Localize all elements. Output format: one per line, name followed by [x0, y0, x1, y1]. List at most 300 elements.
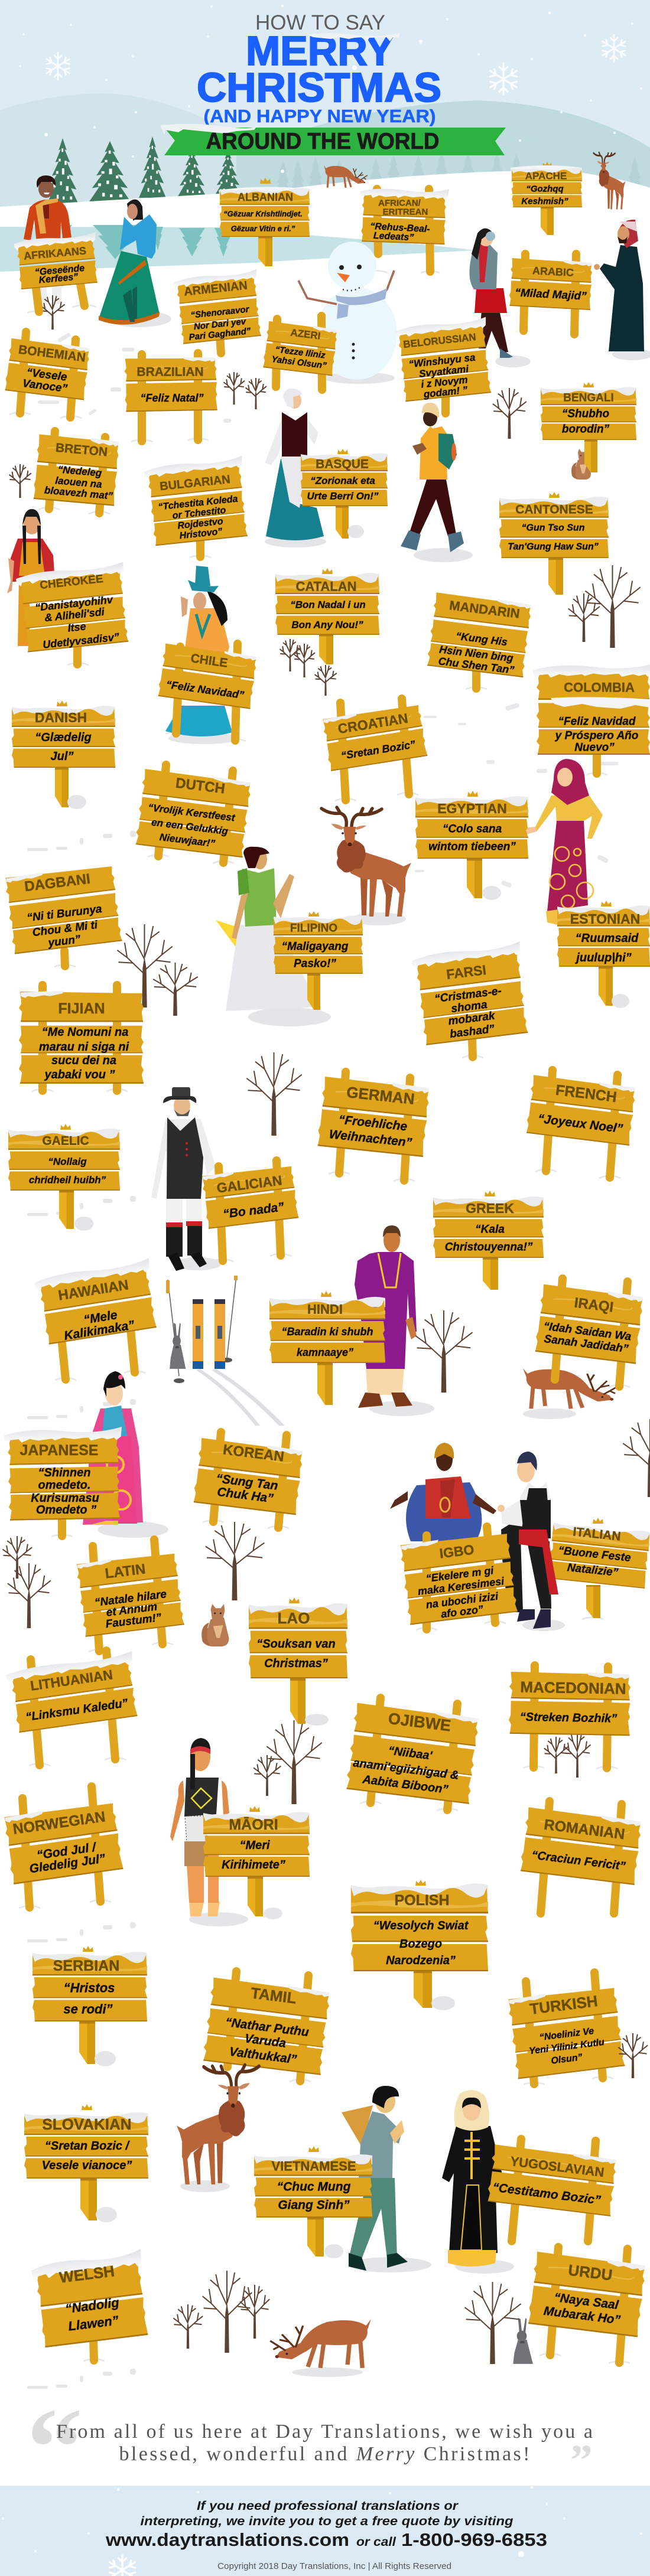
greeting — [31, 1466, 99, 1517]
greeting — [64, 2295, 121, 2334]
language name: NORWEGIAN — [12, 1808, 106, 1838]
language name: SERBIAN — [53, 1958, 119, 1974]
sign: Urdu — [527, 2247, 646, 2363]
greeting: maka Keresimesi — [417, 1575, 505, 1597]
greeting: “Feliz Navidad — [558, 716, 636, 728]
language name: DUTCH — [175, 775, 226, 797]
greeting: “Maligayang — [282, 940, 349, 953]
language name: FIJIAN — [58, 1000, 105, 1017]
greeting — [34, 263, 85, 285]
greeting: Urte Berri On!” — [307, 490, 379, 502]
greeting: Itse — [67, 620, 86, 634]
greeting: “Hristos — [64, 1981, 115, 1995]
language name: HAWAIIAN — [57, 1277, 129, 1304]
greeting: Chu Shen Tan” — [438, 655, 515, 676]
greeting — [373, 1919, 469, 1967]
sign: Japanese — [4, 1427, 124, 1536]
sign: Maori — [203, 1806, 310, 1919]
language name: ARMENIAN — [183, 279, 248, 299]
title block — [160, 11, 506, 155]
language name: CANTONESE — [515, 503, 593, 516]
phone number: 1-800-969-6853 — [401, 2529, 547, 2550]
language name: GREEK — [466, 1201, 514, 1216]
greeting: “Chuc Mung — [277, 2180, 351, 2193]
sky panel — [0, 0, 650, 301]
greeting: “Feliz Natal” — [140, 392, 204, 404]
greeting — [508, 523, 599, 552]
greeting — [555, 716, 638, 754]
bare trees — [2, 295, 650, 2364]
greeting: “Bon Nadal i un — [290, 599, 366, 611]
greeting: Mubarak Ho” — [543, 2304, 622, 2327]
greeting — [277, 2180, 351, 2212]
greeting: Chou & Mi ti — [32, 919, 99, 939]
heading: around the world: AROUND THE WORLD — [206, 129, 440, 154]
sign: Belorussian — [394, 317, 494, 413]
greeting: Bozego — [399, 1938, 442, 1951]
greeting — [215, 1472, 279, 1505]
greeting: Yahsi Olsun” — [271, 354, 327, 371]
greeting: “Gun Tso Sun — [522, 523, 585, 533]
greeting: “Ruumsaid — [576, 932, 639, 945]
greeting: omedeto. — [38, 1479, 90, 1492]
deer: standing top right — [593, 152, 626, 209]
greeting: yuun” — [47, 933, 82, 950]
falling snow dots — [19, 5, 642, 190]
language name: BOHEMIAN — [18, 343, 86, 364]
greeting — [329, 1113, 413, 1150]
language name: CHILE — [190, 651, 229, 670]
greeting — [428, 823, 516, 853]
frozen lake — [0, 225, 476, 272]
greeting: Kirihimete” — [222, 1858, 285, 1871]
greeting: “Sretan Bozic” — [340, 738, 416, 762]
sign: Filipino — [274, 911, 363, 1010]
closing message — [56, 2421, 593, 2465]
greeting — [26, 903, 103, 950]
greeting: “Nathar Puthu — [225, 2016, 310, 2039]
greeting: Kerfees” — [38, 272, 79, 285]
greeting: borodin” — [562, 423, 610, 436]
language name: BELORUSSIAN — [402, 331, 477, 350]
greeting: “Gëzuar Krishtlindjet. — [223, 209, 303, 219]
greeting: Llawen” — [67, 2313, 119, 2334]
greeting — [222, 1839, 285, 1871]
figure: man with red sash — [498, 1452, 565, 1631]
language name: BENGALI — [563, 392, 614, 404]
sign: Armenian — [173, 269, 264, 353]
sign: Arabic — [509, 254, 593, 334]
figure: woman in green blouse — [216, 847, 331, 1026]
sign: Estonian — [557, 901, 650, 1008]
greeting — [29, 1156, 106, 1186]
language name: VIETNAMESE — [271, 2159, 356, 2173]
language name: CROATIAN — [337, 710, 409, 736]
language name: KOREAN — [222, 1442, 285, 1465]
language name: AZERI — [290, 327, 321, 342]
greeting — [44, 464, 113, 502]
forest of snowy fir trees — [46, 136, 242, 206]
language name: AFRIKAANS — [23, 244, 87, 262]
greeting — [543, 2291, 622, 2327]
greeting: “Sretan Bozic / — [45, 2140, 131, 2153]
greeting: Chuk Ha” — [216, 1485, 274, 1505]
language name: HINDI — [307, 1302, 343, 1317]
greeting: “Craciun Fericit” — [531, 1848, 626, 1873]
greeting — [28, 1840, 106, 1876]
greeting: Christmas” — [264, 1657, 328, 1670]
heading: christmas: CHRISTMAS — [197, 64, 441, 110]
greeting — [290, 599, 366, 631]
language name: TAMIL — [250, 1984, 297, 2007]
deer: grazing right side — [523, 1368, 618, 1419]
language name: BRETON — [55, 441, 108, 459]
sign: Danish — [12, 700, 115, 809]
greeting: “Glædelig — [35, 731, 92, 744]
sign: Lao — [249, 1597, 347, 1726]
greeting: “Tezze Iliniz — [275, 344, 326, 361]
greeting: “Vesele — [25, 366, 68, 384]
sign: Iraqi — [534, 1279, 644, 1387]
sign: Norwegian — [3, 1786, 124, 1907]
greeting: y Próspero Año — [555, 730, 638, 742]
footer snow dots — [2, 2486, 642, 2557]
sign: Chile — [157, 643, 258, 741]
greeting: godam! ” — [422, 384, 469, 400]
sign: Bengali — [541, 382, 636, 472]
language name: LITHUANIAN — [30, 1667, 113, 1694]
greeting: “Cestitamo Bozic” — [492, 2180, 602, 2207]
language name: COLOMBIA — [564, 680, 635, 694]
language name: ARABIC — [532, 265, 574, 279]
greeting: “Sung Tan — [215, 1472, 279, 1493]
greeting: mobarak — [447, 1010, 496, 1028]
sign: Fijian — [19, 985, 144, 1091]
sign: Slovakian — [24, 2104, 148, 2222]
greeting: Ledeats” — [373, 231, 414, 243]
greeting — [22, 366, 69, 395]
greeting: Vanoce” — [22, 377, 69, 395]
sign: Cherokee — [15, 562, 132, 664]
mountains — [0, 93, 650, 213]
green banner — [164, 128, 506, 155]
language name: FILIPINO — [290, 922, 337, 934]
greeting: “Ekelere m gi — [425, 1564, 495, 1584]
snow on merry — [306, 33, 400, 43]
greeting: “Linksmu Kaledu” — [25, 1697, 129, 1724]
language name: JAPANESE — [20, 1442, 98, 1459]
greeting: “Vrolijk Kerstfeest — [147, 802, 236, 824]
sign: Polish — [351, 1880, 488, 2010]
greeting: Aabita Biboon” — [361, 1773, 449, 1796]
sign: Gaelic — [8, 1124, 120, 1231]
greeting: Varuda — [244, 2032, 287, 2050]
greeting: “Idah Saidan Wa — [542, 1320, 632, 1344]
greeting — [35, 731, 92, 763]
greeting — [438, 630, 515, 676]
sign: Basque — [301, 449, 388, 539]
language name: ERITREAN — [383, 207, 428, 217]
greeting — [370, 221, 430, 243]
language name: TURKISH — [529, 1992, 599, 2018]
sign: Vietnamese — [254, 2146, 372, 2258]
figure: arab man — [594, 220, 650, 360]
greeting: shoma — [450, 999, 488, 1015]
greeting: Keshmish” — [521, 196, 568, 207]
greeting: or Tchestito — [172, 506, 226, 521]
sign: Egyptian — [415, 791, 528, 900]
sign: Brazilian — [124, 353, 217, 441]
greeting: Valthukkal” — [229, 2045, 298, 2066]
figure: hiker with backpack — [401, 403, 473, 562]
greeting: et Annum — [106, 1600, 158, 1619]
greeting: “Mele — [83, 1308, 118, 1327]
greeting: “Noeliniz Ve — [539, 2026, 594, 2043]
figure: woman with white bonnet — [265, 389, 326, 547]
sign: Dagbani — [4, 864, 122, 966]
greeting: bashad” — [449, 1023, 495, 1041]
greeting: “Souksan van — [256, 1638, 336, 1651]
greeting: “Shinnen — [38, 1466, 90, 1479]
greeting: Weihnachten” — [329, 1127, 413, 1150]
greeting: Kurisumasu — [31, 1492, 99, 1505]
sign: Catalan — [275, 568, 379, 664]
deer: grazing bottom — [270, 2319, 371, 2377]
greeting — [282, 940, 349, 970]
language name: YUGOSLAVIAN — [509, 2154, 605, 2180]
language name: OJIBWE — [387, 1710, 452, 1734]
figure: man in black hat and vest — [151, 1087, 222, 1271]
greeting — [557, 1544, 632, 1579]
distant pale trees — [275, 152, 643, 196]
sign: Breton — [32, 431, 120, 513]
sign: Azeri — [262, 316, 338, 390]
greeting: Hsin Nien bing — [438, 643, 514, 664]
sign: Dutch — [135, 765, 252, 863]
heading: how to say: HOW TO SAY — [255, 11, 385, 34]
large snowflakes — [47, 35, 625, 95]
deer: facing viewer by Tamil sign — [177, 2065, 259, 2192]
sign: Italian — [548, 1518, 650, 1618]
greeting: Christouyenna!” — [445, 1241, 533, 1253]
sign: Lithuanian — [5, 1651, 141, 1765]
greeting: Pasko!” — [294, 958, 336, 970]
sign: Tamil — [202, 1971, 331, 2081]
greeting — [42, 2140, 132, 2172]
greeting: Olsun” — [550, 2052, 583, 2066]
call to action: interpreting, we invite you to get a free quote by visiting — [141, 2515, 514, 2528]
greeting: Svyatkami — [418, 363, 470, 380]
language name: ROMANIAN — [543, 1817, 626, 1843]
language name: SLOVAKIAN — [42, 2115, 132, 2133]
greeting: “Niibaa' — [388, 1744, 434, 1763]
sign: Macedonian — [509, 1665, 630, 1768]
figure: woman in teal hat — [165, 566, 239, 744]
tree by Turkish sign — [618, 2033, 648, 2078]
language name: ITALIAN — [572, 1525, 622, 1544]
rabbit bottom — [513, 2318, 533, 2364]
greeting: “God Jul / — [36, 1840, 98, 1862]
language name: AFRICAN/ — [378, 198, 421, 208]
greeting — [528, 2026, 605, 2066]
sign: Afrikaans — [14, 232, 100, 312]
greeting: juulup|hi” — [574, 951, 632, 964]
sign: Korean — [193, 1432, 304, 1528]
squirrels — [202, 449, 591, 1646]
greeting — [34, 594, 120, 651]
greeting: “Gozhqq — [526, 184, 564, 194]
greeting: chridheil huibh” — [29, 1174, 106, 1186]
deer: facing viewer mid page — [321, 807, 411, 925]
language name: CHEROKEE — [39, 573, 104, 592]
greeting: “Danistayohihv — [34, 594, 114, 614]
greeting — [408, 352, 476, 400]
greeting — [542, 1320, 632, 1355]
greeting: Natalizie” — [567, 1561, 619, 1579]
language name: FARSI — [446, 962, 487, 982]
greeting — [188, 304, 252, 343]
greeting: Faustum!” — [105, 1612, 162, 1631]
sign: Croatian — [321, 699, 427, 800]
greeting: Nuevo” — [574, 742, 615, 754]
closing message: From all of us here at Day Translations, we wish you a — [56, 2421, 593, 2443]
greeting: “Kala — [475, 1224, 505, 1235]
greeting: “Nedeleg — [57, 464, 103, 479]
sign: Hindi — [269, 1291, 385, 1405]
greeting: Vesele vianoce” — [42, 2159, 132, 2172]
sign: Greek — [433, 1191, 544, 1290]
greeting: yabaki vou ” — [44, 1068, 115, 1081]
skis and poles — [166, 1276, 285, 1426]
sign: African/Eritrean — [358, 186, 449, 272]
greeting: “Nadolig — [64, 2295, 121, 2316]
greeting: “Zorionak eta — [310, 475, 375, 487]
greeting: “Streken Bozhik” — [520, 1711, 617, 1725]
website: www.daytranslations.com — [105, 2529, 349, 2550]
greeting: “Naya Saal — [553, 2291, 620, 2312]
greeting: “Feliz Navidad” — [165, 679, 245, 701]
greeting: “Colo sana — [443, 823, 502, 835]
greeting: Udetlyvsadisv” — [42, 631, 120, 651]
language name: BRAZILIAN — [136, 365, 204, 379]
greeting — [225, 2016, 310, 2066]
figure: woman in magenta hijab — [512, 759, 603, 925]
sign: German — [317, 1072, 430, 1181]
footer snowflake — [109, 2555, 135, 2576]
heading: merry: MERRY — [246, 28, 394, 74]
or call: or call — [356, 2535, 396, 2549]
sign: Galician — [201, 1160, 298, 1261]
sign: Turkish — [507, 1972, 625, 2084]
figure: native woman with braids — [7, 509, 55, 646]
language name: MĀORI — [229, 1817, 278, 1833]
language name: ESTONIAN — [570, 911, 640, 927]
sign: Cantonese — [499, 492, 609, 595]
sign: Mandarin — [426, 592, 532, 689]
greeting — [147, 802, 236, 849]
greeting — [562, 407, 610, 436]
greeting — [434, 985, 502, 1041]
sign: French — [525, 1070, 636, 1178]
language name: LATIN — [104, 1561, 147, 1582]
scattered snow marks — [38, 332, 619, 888]
greeting: afo ozo” — [440, 1603, 484, 1620]
language name: BASQUE — [316, 457, 369, 471]
greeting: “Ni ti Burunya — [26, 903, 103, 924]
greeting: Tan'Gung Haw Sun” — [508, 542, 599, 552]
greeting: Kalikimaka” — [63, 1318, 136, 1343]
greeting: marau ni siga ni — [39, 1041, 129, 1054]
language name: IRAQI — [573, 1295, 615, 1315]
greeting: “Bo nada” — [222, 1200, 285, 1221]
closing quote mark: ” — [570, 2436, 592, 2485]
greeting: “Rehus-Beal- — [370, 221, 430, 234]
sign: Ojibwe — [345, 1698, 480, 1810]
snow mounds at sign posts — [9, 270, 630, 2363]
footprints in snow — [27, 831, 136, 2389]
sign: Welsh — [31, 2249, 151, 2360]
greeting: Nor Dari yev — [193, 317, 247, 332]
greeting: “Geseënde — [34, 263, 85, 278]
language name: POLISH — [394, 1892, 450, 1909]
greeting: & Aliheli'sdi — [44, 606, 106, 624]
heading: and happy new year: (AND HAPPY NEW YEAR) — [203, 106, 436, 126]
greeting — [39, 1026, 129, 1081]
greeting: anami'egiizhigad & — [352, 1756, 460, 1782]
language name: URDU — [567, 2261, 613, 2284]
greeting — [271, 344, 327, 371]
greeting: “Tchestita Koleda — [158, 494, 238, 513]
greeting: “Meri — [239, 1839, 270, 1852]
greeting: “Buone Feste — [557, 1544, 632, 1564]
greeting: “Froehliche — [338, 1113, 408, 1134]
greeting: en een Gelukkig — [151, 817, 229, 837]
greeting — [158, 494, 238, 541]
language name: MACEDONIAN — [520, 1678, 626, 1698]
greeting: na ubochi izizi — [425, 1590, 499, 1610]
greeting: Rojdestvo — [177, 516, 224, 531]
greeting: Yeni Yiliniz Kutlu — [528, 2037, 605, 2056]
snow on banner — [160, 124, 258, 135]
greeting: “Joyeux Noel” — [537, 1112, 624, 1136]
figure: man with orange jacket — [24, 175, 72, 310]
greeting: Omedeto ” — [36, 1504, 96, 1517]
language name: MANDARIN — [448, 598, 521, 621]
language name — [378, 198, 428, 217]
sign: Igbo — [399, 1527, 518, 1629]
figure: man carrying basket — [342, 2086, 431, 2272]
language name: DANISH — [35, 710, 87, 725]
greeting — [256, 1638, 336, 1670]
greeting: “Winshuyu sa — [408, 352, 476, 370]
opening quote mark: “ — [27, 2386, 83, 2510]
greeting: “Kung His — [455, 630, 508, 648]
greeting: “Cristmas-e- — [434, 985, 502, 1005]
greeting: Hristovo” — [179, 527, 223, 541]
sign: Colombia — [533, 664, 650, 774]
greeting — [223, 209, 303, 233]
sign: Serbian — [32, 1946, 147, 2066]
greeting: “Milad Majid” — [515, 286, 587, 303]
footer panel — [0, 2486, 650, 2576]
greeting: laouen na — [55, 475, 102, 490]
language name: GERMAN — [346, 1083, 415, 1108]
greeting: “Natale hilare — [94, 1588, 168, 1609]
greeting: Sanah Jadidah” — [543, 1333, 629, 1355]
sign: Albanian — [219, 178, 311, 266]
greeting — [281, 1326, 373, 1358]
sign: Farsi — [411, 941, 531, 1057]
